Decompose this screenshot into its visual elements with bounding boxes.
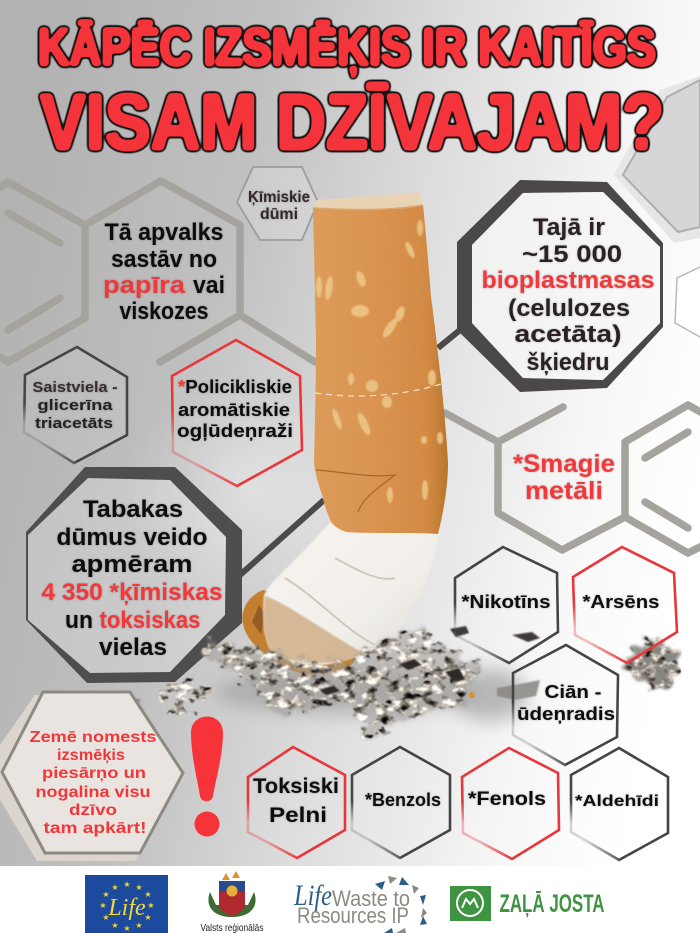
- hexagon: Saistviela: glicerīna: [38, 397, 113, 414]
- hexagon: Saistviela: [24, 347, 127, 463]
- octagon: Tabakas dūmi: [26, 467, 242, 683]
- hexagon: Zemē nomests: izsmēķis: [57, 747, 125, 764]
- title: [38, 18, 664, 166]
- logo: EU Life: ★: [123, 880, 131, 889]
- hexagon: Ciānūdeņradis: Ciān -: [544, 682, 602, 702]
- logo: EU Life: ★: [111, 883, 119, 892]
- octagon: Tabakas dūmi: Tabakas: [83, 496, 183, 523]
- logo: EU Life: ★: [123, 924, 131, 933]
- white tipping paper: [263, 522, 440, 665]
- octagon: bioplastmasas: Tajā ir: [533, 214, 605, 241]
- hexagon: Aldehīdi: *Aldehīdi: [575, 793, 659, 810]
- octagon: Tabakas dūmi: 4 350 *ķīmiskas: [42, 579, 222, 606]
- icon: exclamation mark: [191, 716, 223, 836]
- octagon: bioplastmasas: acetāta): [514, 321, 622, 348]
- logo: Zaļā josta: [450, 886, 604, 921]
- octagon: Tabakas dūmi: vielas: [99, 634, 167, 661]
- hexagon: Policikliskie: ogļūdeņraži: [177, 421, 293, 441]
- hexagon: Toksiski Pelni: Toksiski: [253, 775, 339, 798]
- text block: apvalks: vai: [193, 272, 225, 299]
- hexagon: Ķīmiskie dūmi: dūmi: [260, 206, 298, 223]
- octagon: Tabakas dūmi: apmēram: [72, 551, 192, 578]
- octagon: Tabakas dūmi: un: [65, 607, 93, 634]
- hexagon: Benzols: *Benzols: [365, 790, 441, 810]
- hexagon: Aldehīdi: [571, 748, 668, 860]
- octagon: bioplastmasas: bioplastmasas: [482, 267, 654, 294]
- hexagon: Nikotīns: *Nikotīns: [462, 592, 550, 612]
- filter tip: [313, 192, 423, 210]
- text block: apvalks: sastāv no: [111, 246, 217, 273]
- octagon: bioplastmasas: (celulozes: [508, 295, 630, 322]
- ash pile: [110, 626, 676, 737]
- logo: Life Waste to Resources IP: Waste to: [332, 886, 410, 911]
- octagon: bioplastmasas: šķiedru: [526, 349, 610, 376]
- logo: EU Life: ★: [102, 890, 110, 899]
- hexagon: Ciānūdeņradis: ūdeņradis: [517, 704, 615, 724]
- floor shadow: [215, 669, 528, 721]
- text block: apvalks: papīra: [103, 272, 186, 299]
- text block: apvalks: Tā apvalks: [104, 219, 224, 246]
- hexagon: Fenols: [462, 748, 559, 859]
- hexagon: Nikotīns: [455, 547, 558, 663]
- octagon: Tabakas dūmi: toksiskas: [100, 607, 200, 634]
- logo: EU Life: ★: [102, 913, 110, 922]
- hexagon: Arsēns: [573, 547, 677, 663]
- filter speckles: [316, 220, 443, 503]
- logo: Life Waste to Resources IP: Resources IP: [297, 903, 409, 928]
- octagon: bioplastmasas: ~15 000: [522, 241, 622, 268]
- hexagon: Smagie metāli: [513, 450, 615, 505]
- logo: EU Life: ★: [99, 901, 107, 910]
- seam line: [315, 384, 441, 396]
- hexagon: Toksiski Pelni: Pelni: [269, 804, 327, 827]
- orange filter: [313, 205, 448, 534]
- crumple: [316, 470, 395, 512]
- logo: EU Life: Life: [107, 895, 146, 921]
- logo: EU Life: ★: [144, 890, 152, 899]
- logo: EU Life: ★: [135, 883, 143, 892]
- hexagon: Smagie metāli: *Smagie: [513, 450, 615, 478]
- footer: [0, 866, 700, 933]
- burnt end: [242, 590, 356, 674]
- logo: EU Life: ★: [147, 901, 155, 910]
- logo: coat of arms: [200, 871, 264, 933]
- logo: EU Life: ★: [111, 921, 119, 930]
- hexagon: Zemē nomests: piesārņo un: [42, 765, 146, 782]
- hexagon: Zemē nomests: [0, 692, 183, 861]
- logo: Life Waste to Resources IP: Life: [293, 879, 332, 912]
- hexagon: Zemē nomests: nogalina visu: [36, 784, 150, 801]
- logo: EU Life: ★: [135, 921, 143, 930]
- hexagon: Policikliskie: aromātiskie: [178, 400, 290, 420]
- hexagon: Toksiski Pelni: [248, 747, 345, 858]
- hexagon: Policikliskie: *Policikliskie: [178, 377, 292, 397]
- hexagon: Benzols: [352, 747, 450, 858]
- hexagon: Saistviela: Saistviela -: [32, 379, 118, 396]
- hexagon: Ķīmiskie dūmi: [237, 167, 318, 240]
- text block: apvalks: [103, 219, 225, 325]
- hexagon: Saistviela: triacetāts: [35, 415, 113, 432]
- octagon: Tabakas dūmi: dūmus veido: [56, 524, 208, 551]
- logo: EU Life: ★: [144, 913, 152, 922]
- hexagon: Policikliskie: [172, 340, 302, 486]
- hexagon: Fenols: *Fenols: [468, 789, 546, 810]
- logo: Zaļā josta: ZAĻĀ JOSTA: [500, 890, 604, 918]
- background hexagon pattern: [0, 76, 700, 575]
- hexagon: Ciānūdeņradis: [513, 645, 618, 765]
- ash stain on paper: [264, 596, 365, 663]
- hexagon: Smagie metāli: metāli: [525, 477, 603, 505]
- hexagon: Zemē nomests: Zemē nomests: [30, 729, 157, 746]
- hexagon: Zemē nomests: dzīvo: [69, 802, 117, 819]
- hexagon: Zemē nomests: tam apkārt!: [44, 820, 146, 837]
- logo: Life Waste to Resources IP: [293, 876, 427, 933]
- hexagon: Arsēns: *Arsēns: [582, 592, 660, 612]
- hexagon: Ķīmiskie dūmi: Ķīmiskie: [248, 189, 310, 206]
- text block: apvalks: viskozes: [120, 298, 208, 325]
- cigarette butt: [242, 192, 448, 674]
- logo: EU Life: [85, 875, 168, 933]
- octagon: bioplastmasas: [457, 180, 663, 392]
